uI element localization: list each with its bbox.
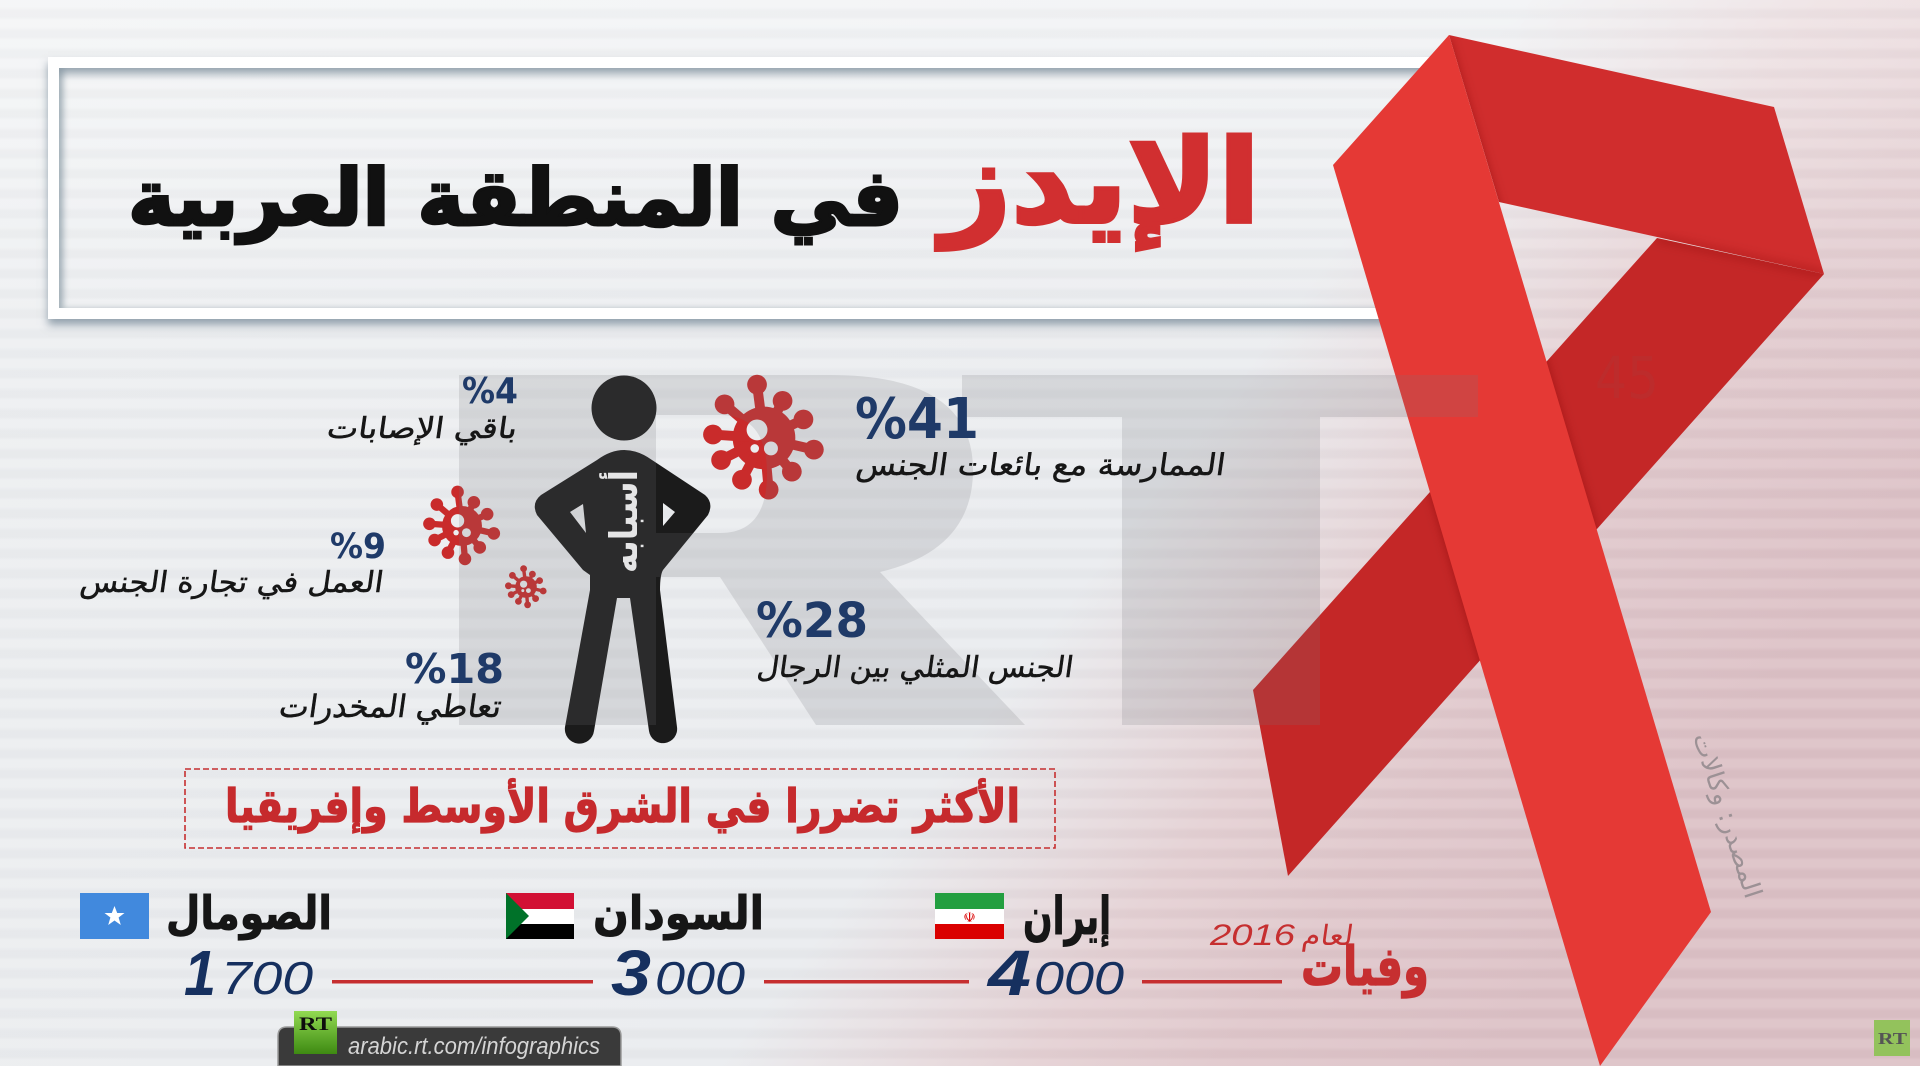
- number: 4000: 000: [1034, 952, 1124, 1004]
- source note: المصدر: وكالات: [1686, 729, 1768, 902]
- stat: 41%: الممارسة مع بائعات الجنس: [854, 448, 1228, 483]
- stat: 9%: العمل في تجارة الجنس: [78, 565, 386, 600]
- country: Somalia: الصومال: [166, 886, 332, 940]
- website tag: [278, 1027, 621, 1066]
- title: الإيدز: [936, 116, 1260, 251]
- stat: 18%: [277, 645, 504, 725]
- RT logo corner: RT: [1878, 1029, 1908, 1048]
- virus icon large: [703, 375, 824, 499]
- stat: 18%: تعاطي المخدرات: [277, 689, 504, 725]
- deaths label: [1209, 919, 1429, 998]
- number: 4000: 4: [986, 937, 1031, 1009]
- faint number on ribbon: 45: [1595, 344, 1659, 412]
- deaths label: وفيات: [1301, 935, 1429, 998]
- stat: 4%: %4: [462, 371, 518, 412]
- flag: Somalia: [80, 893, 149, 939]
- connector lines: [332, 980, 1282, 984]
- RT watermark: [459, 375, 1478, 725]
- stat: 28%: [755, 593, 1076, 685]
- stat: 18%: %18: [405, 645, 504, 693]
- title: في المنطقة العربية: [128, 154, 903, 244]
- number: 3000: 3: [611, 937, 651, 1009]
- RT logo green: [294, 1011, 337, 1054]
- red ribbon: [1253, 35, 1824, 1066]
- callout: الأكثر تضررا في الشرق الأوسط وإفريقيا: [225, 778, 1020, 834]
- stat: 4%: [325, 371, 520, 446]
- vertical label: أسبابه: [599, 470, 646, 573]
- number: 1700: [184, 937, 313, 1009]
- number: 3000: [611, 937, 745, 1009]
- flag: Iran: [935, 893, 1004, 939]
- stat: 9%: [78, 527, 386, 600]
- title: [128, 116, 1260, 251]
- deaths label: لعام: [1300, 919, 1356, 952]
- RT logo corner: [1874, 1020, 1910, 1056]
- country: Sudan: السودان: [593, 886, 764, 940]
- number: 1700: 1: [184, 937, 216, 1009]
- deaths label: 2016: [1209, 919, 1295, 952]
- stat: 28%: %28: [756, 593, 868, 649]
- number: 1700: 700: [221, 952, 313, 1004]
- stat: 4%: باقي الإصابات: [325, 411, 520, 446]
- flag: Iran: ☫: [963, 910, 976, 926]
- virus icon medium: [423, 486, 500, 565]
- number: 3000: 000: [655, 952, 745, 1004]
- flag: Sudan: [506, 893, 574, 939]
- stat: 28%: الجنس المثلي بين الرجال: [755, 650, 1076, 685]
- number: 4000: [986, 937, 1124, 1009]
- title frame: [48, 57, 1458, 319]
- stat: 41%: %41: [855, 387, 979, 452]
- website tag: arabic.rt.com/infographics: [348, 1033, 600, 1060]
- human figure: [535, 376, 710, 744]
- callout: [185, 769, 1055, 848]
- country: Iran: إيران: [1023, 887, 1111, 947]
- RT logo green: RT: [299, 1014, 332, 1035]
- virus icon small: [505, 565, 547, 608]
- stat: 41%: [854, 387, 1228, 483]
- stat: 9%: %9: [330, 527, 386, 567]
